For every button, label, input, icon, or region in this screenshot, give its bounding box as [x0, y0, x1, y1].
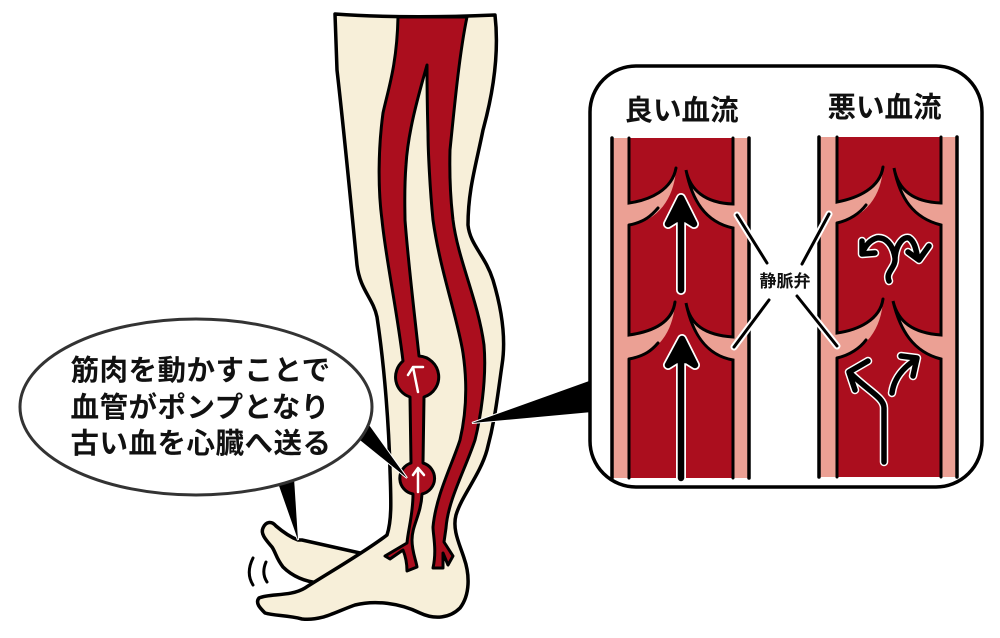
connector lines to valves [734, 214, 837, 347]
arrow: straight flow lower [668, 339, 695, 478]
vessel: good flow [612, 138, 749, 478]
label: venous valve: 静脈弁 [760, 271, 810, 291]
vessel lumen [629, 138, 733, 478]
valve pair upper [835, 167, 943, 226]
vessel wall [612, 138, 749, 478]
heading: bad blood flow: 悪い血流 [827, 92, 942, 124]
bubble text: 血管がポンプとなり [70, 391, 330, 424]
arrow in upper muscle pump [408, 367, 423, 392]
vessel lumen [837, 137, 941, 477]
panel frame [590, 66, 982, 487]
vessel and valve outlines [819, 137, 957, 477]
pointer from leg to panel [472, 380, 592, 423]
panel: blood flow comparison [590, 66, 982, 487]
bubble text: 古い血を心臓へ送る [70, 428, 332, 460]
motion lines beside foot [249, 558, 267, 585]
pointer from speech bubble to toes [277, 478, 298, 540]
arrow: straight flow upper [668, 198, 694, 290]
arrow: turbulent flow upper [862, 238, 929, 281]
pointer from speech bubble to calf pump [350, 418, 407, 478]
back foot raised on toes [262, 522, 375, 583]
vessel wall [819, 137, 957, 477]
vessel and valve outlines [612, 138, 749, 478]
veins in the leg [379, 17, 485, 571]
heading: good blood flow: 良い血流 [624, 95, 739, 127]
illustration: leg [249, 14, 504, 619]
valve pair lower [835, 299, 943, 360]
arrow: turbulent flow lower left [849, 361, 884, 462]
vessel: bad flow [819, 137, 957, 477]
bubble shape [20, 319, 372, 495]
bubble text: 筋肉を動かすことで [70, 355, 331, 387]
speech bubble [20, 319, 372, 495]
arrow: turbulent flow lower right [892, 356, 917, 393]
arrow in lower muscle pump [413, 468, 424, 492]
leg and front foot outline [258, 14, 504, 619]
valve pair upper [627, 168, 735, 229]
valve pair lower [627, 302, 735, 361]
